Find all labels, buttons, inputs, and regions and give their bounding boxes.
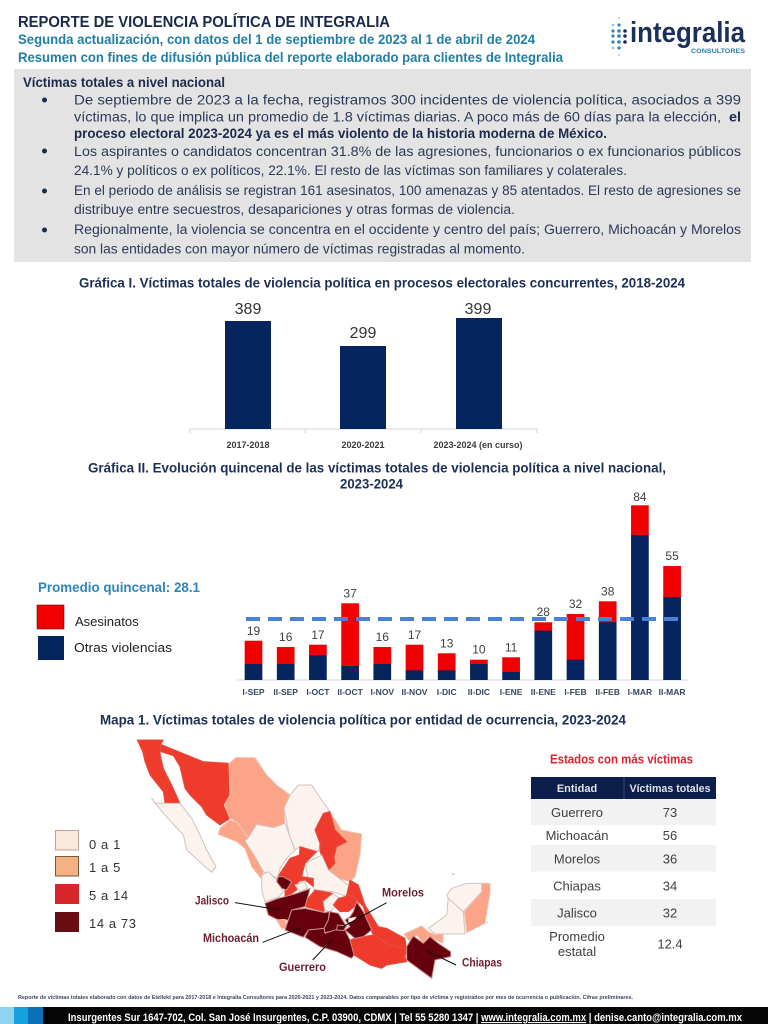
logo: integralia consultores — [611, 17, 746, 56]
bullet 2: Los aspirantes o candidatos concentran 31.8% de las agresiones, funcionarios o ex funcionarios públicos — [74, 144, 741, 159]
bar values: 28 — [537, 605, 550, 619]
bar values: 17 — [408, 628, 421, 642]
bullet 2 — [42, 144, 741, 178]
bar categories: I-OCT — [306, 687, 330, 697]
state labels: Guerrero — [279, 960, 326, 974]
bar categories: II-OCT — [337, 687, 364, 697]
bar chart: gráfica I: 399 — [465, 301, 491, 318]
bar values: 37 — [343, 586, 357, 600]
bullet 3: distribuye entre secuestros, desapariciones y otras formas de violencia. — [74, 202, 515, 217]
table: estados con más víctimas: Michoacán — [546, 828, 608, 843]
bullet 1: víctimas, lo que implica un promedio de 1.8 víctimas diarias. A poco más de 60 días para la elección, — [74, 110, 721, 124]
bullet 3 — [42, 183, 741, 217]
bar chart: gráfica I: 2023-2024 (en curso) — [433, 440, 523, 450]
table: estados con más víctimas: Víctimas totales — [630, 783, 710, 795]
map legend: 14 a 73 — [89, 916, 137, 931]
bullet 4: Regionalmente, la violencia se concentra en el occidente y centro del país; Guerrero, Michoacán y Morelos — [74, 222, 741, 237]
table: estados con más víctimas: Entidad — [557, 783, 597, 795]
legend: gráfica II — [37, 605, 173, 660]
bar values: 19 — [247, 624, 260, 638]
logo: integralia consultores: CONSULTORES — [691, 49, 745, 55]
bullet 4: son las entidades con mayor número de víctimas registradas al momento. — [74, 242, 525, 256]
table: estados con más víctimas: 34 — [663, 878, 677, 894]
bar categories: I-NOV — [370, 687, 394, 697]
header: report title: REPORTE DE VIOLENCIA POLÍTICA DE INTEGRALIA — [18, 14, 390, 31]
state labels — [195, 886, 502, 974]
footnote: Reporte de víctimas totales elaborado con datos de Etellekt para 2017-2018 e Integralia Consultores para 2020-2021 y 2023-2024. Datos comparables por tipo de víctima y registrados por mes de ocurrencia o publicación. Cifras preliminares. — [18, 995, 633, 1001]
table: estados con más víctimas: 32 — [663, 906, 677, 920]
bar values — [247, 490, 679, 656]
table: estados con más víctimas — [531, 777, 716, 959]
bullet 2: 24.1% y políticos o ex políticos, 22.1%. El resto de las víctimas son familiares y colaterales. — [74, 163, 627, 178]
table: estados con más víctimas: Jalisco — [557, 906, 597, 920]
bar chart: gráfica I: 299 — [350, 325, 376, 342]
bullet 3: En el periodo de análisis se registran 161 asesinatos, 100 amenazas y 85 atentados. El resto de agresiones se — [74, 183, 741, 198]
header: report title — [18, 14, 563, 65]
bullet 1: proceso electoral 2023-2024 ya es el más violento de la historia moderna de México. — [74, 126, 607, 141]
stacked bar chart: gráfica II — [237, 490, 688, 697]
table: estados con más víctimas: 12.4 — [657, 936, 683, 952]
bar categories: II-NOV — [402, 687, 428, 697]
legend: gráfica II: Otras violencias — [74, 640, 173, 655]
bar categories: I-DIC — [437, 687, 457, 697]
bar categories: II-FEB — [595, 687, 620, 697]
footer contact bar: Insurgentes Sur 1647-702, Col. San José Insurgentes, C.P. 03900, CDMX | Tel 55 5280 1347 | www.integralia.com.mx | denise.canto@integralia.com.mx — [68, 1012, 743, 1024]
header: report title: Segunda actualización, con datos del 1 de septiembre de 2023 al 1 de abril de 2024 — [18, 31, 535, 47]
bar values: 38 — [601, 584, 615, 598]
bar categories — [242, 687, 686, 697]
map legend — [55, 830, 137, 932]
table: estados con más víctimas: Chiapas — [553, 878, 601, 894]
bar categories: I-ENE — [500, 687, 523, 697]
bar values: 17 — [311, 628, 325, 642]
table: estados con más víctimas: 56 — [663, 828, 677, 843]
table: estados con más víctimas: 73 — [663, 805, 677, 820]
map legend: 0 a 1 — [89, 837, 121, 852]
heading: gráfica I: Gráfica I. Víctimas totales de violencia política en procesos electorales concurrentes, 2018-2024 — [79, 276, 685, 290]
central and southern states — [262, 847, 407, 968]
leader lines — [235, 903, 456, 965]
panel: víctimas totales a nivel nacional — [14, 69, 751, 262]
state labels: Jalisco — [195, 894, 229, 908]
legend: gráfica II: Asesinatos — [75, 614, 139, 629]
state labels: Morelos — [382, 886, 424, 900]
footer contact bar — [0, 1007, 768, 1024]
bar categories: I-MAR — [628, 687, 652, 697]
bar values: 13 — [440, 636, 454, 650]
map legend: 1 a 5 — [89, 860, 121, 875]
bar categories: II-SEP — [273, 687, 298, 697]
state labels: Chiapas — [462, 956, 502, 970]
callout: promedio quincenal: Promedio quincenal: 28.1 — [38, 579, 200, 595]
table heading: estados con más víctimas: Estados con más víctimas — [550, 752, 693, 766]
bar values: 32 — [569, 597, 582, 611]
heading: mapa 1: Mapa 1. Víctimas totales de violencia política por entidad de ocurrencia, 2023-2024 — [100, 712, 626, 728]
bar values: 55 — [665, 549, 679, 563]
heading: gráfica II: 2023-2024 — [340, 476, 403, 492]
table: estados con más víctimas: Promedio — [549, 929, 605, 944]
bar values: 16 — [279, 630, 293, 644]
bullet 1: De septiembre de 2023 a la fecha, registramos 300 incidentes de violencia política, asociados a 399 — [74, 92, 741, 108]
bar chart: gráfica I — [190, 301, 537, 450]
bar categories: I-SEP — [242, 687, 265, 697]
table: estados con más víctimas: estatal — [558, 944, 596, 959]
southeastern states — [404, 873, 490, 978]
heading: gráfica II: Gráfica II. Evolución quincenal de las víctimas totales de violencia política a nivel nacional, — [88, 460, 666, 476]
bar chart: gráfica I: 2020-2021 — [341, 440, 385, 450]
bar categories: I-FEB — [564, 687, 587, 697]
average line — [246, 617, 680, 621]
bar categories: II-DIC — [468, 687, 490, 697]
bar values: 84 — [633, 490, 647, 504]
bar categories: II-MAR — [659, 687, 686, 697]
table: estados con más víctimas: Guerrero — [551, 805, 603, 820]
bar chart: gráfica I: 389 — [235, 301, 261, 318]
bar values: 11 — [505, 640, 518, 654]
state labels: Michoacán — [203, 931, 259, 945]
bar values: 10 — [472, 642, 486, 656]
table: estados con más víctimas: 36 — [663, 852, 677, 866]
northern states — [137, 740, 362, 882]
bullet 4 — [42, 222, 741, 256]
choropleth map of Mexico — [137, 740, 502, 978]
bar categories: II-ENE — [531, 687, 556, 697]
bullet 1: el — [729, 110, 741, 124]
table: estados con más víctimas: Morelos — [554, 852, 601, 866]
bar values: 16 — [376, 630, 389, 644]
panel heading: Víctimas totales a nivel nacional — [23, 74, 225, 90]
bar chart: gráfica I: 2017-2018 — [226, 440, 270, 450]
header: report title: Resumen con fines de difusión pública del reporte elaborado para clientes de Integralia — [18, 49, 563, 65]
map legend: 5 a 14 — [89, 888, 129, 903]
bullet 1 — [42, 92, 741, 141]
heading: gráfica II — [88, 460, 666, 492]
logo: integralia consultores: integralia — [630, 17, 746, 49]
